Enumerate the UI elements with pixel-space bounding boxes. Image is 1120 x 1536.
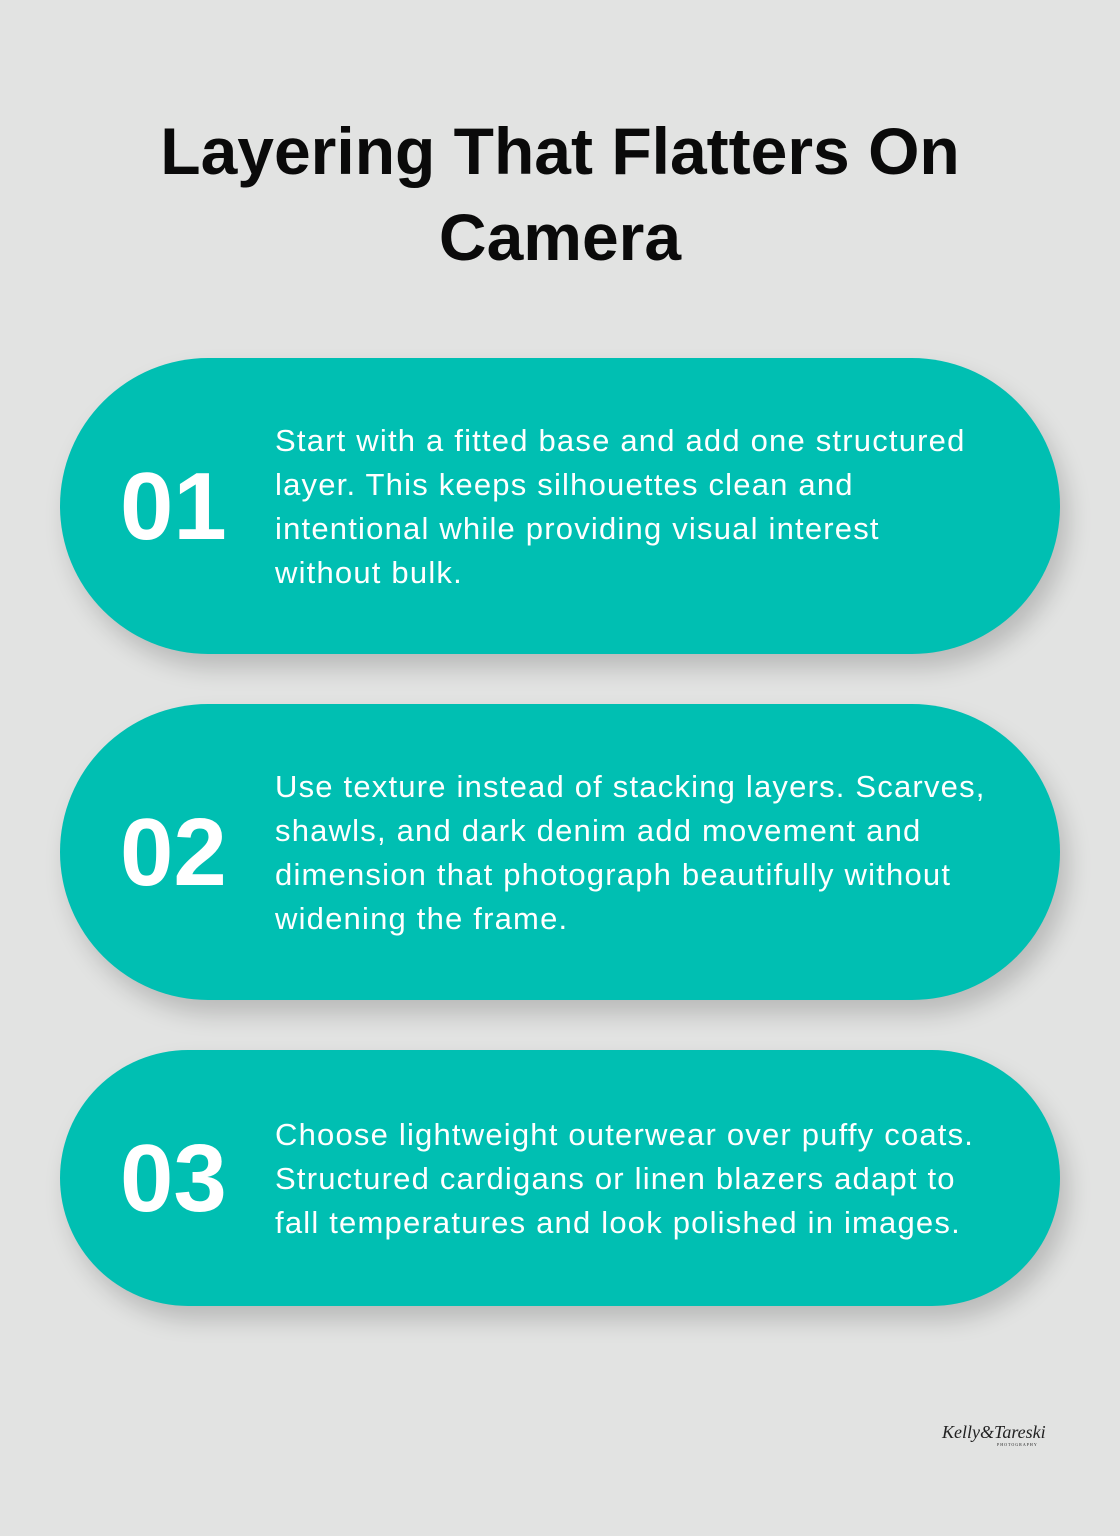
- text 02: widening the frame.: [275, 901, 568, 936]
- text 03: fall temperatures and look polished in images.: [275, 1205, 961, 1240]
- text 01: Start with a fitted base and add one structured: [275, 423, 966, 458]
- title: Camera: [439, 200, 681, 274]
- text 02: dimension that photograph beautifully without: [275, 857, 951, 892]
- title: [160, 114, 960, 274]
- text 01: layer. This keeps silhouettes clean and: [275, 467, 854, 502]
- panel: step 03: [60, 1050, 1060, 1306]
- number 03: 03: [120, 1125, 227, 1232]
- text 03: [275, 1117, 974, 1240]
- text 01: without bulk.: [275, 555, 463, 590]
- text 01: [275, 423, 966, 590]
- logo signature: Kelly&Tareski: [942, 1422, 1046, 1442]
- text 03: Choose lightweight outerwear over puffy coats.: [275, 1117, 974, 1152]
- text 03: Structured cardigans or linen blazers adapt to: [275, 1161, 956, 1196]
- panel: step 01: [60, 358, 1060, 654]
- number 02: 02: [120, 799, 227, 906]
- logo signature: PHOTOGRAPHY: [997, 1442, 1038, 1447]
- text 01: intentional while providing visual interest: [275, 511, 880, 546]
- number 01: 01: [120, 453, 227, 560]
- panel: step 02: [60, 704, 1060, 1000]
- text 02: [275, 769, 986, 936]
- text 02: shawls, and dark denim add movement and: [275, 813, 921, 848]
- title: Layering That Flatters On: [160, 114, 960, 188]
- text 02: Use texture instead of stacking layers. Scarves,: [275, 769, 986, 804]
